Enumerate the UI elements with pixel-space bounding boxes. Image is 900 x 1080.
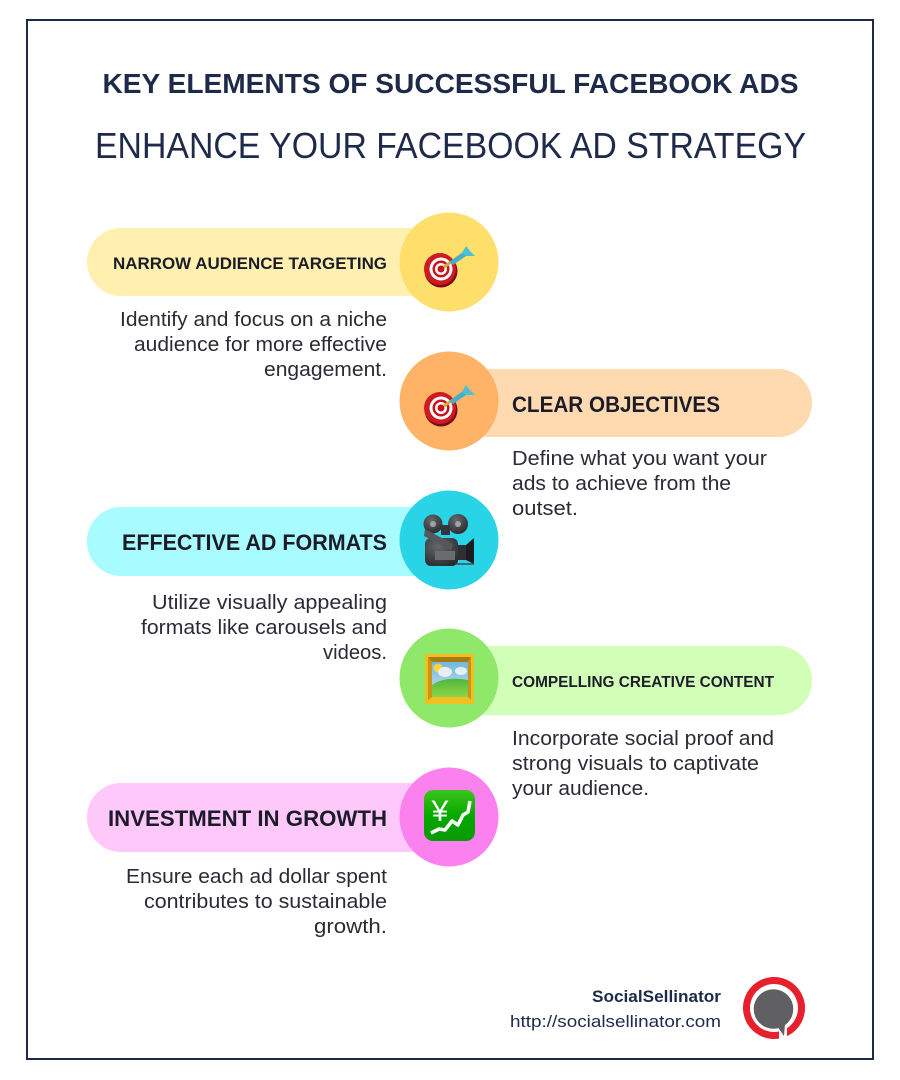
panel: effective ad formats [87,490,498,664]
text: narrow audience description: audience for more effective [134,334,387,356]
footer brand name: SocialSellinator [592,987,721,1006]
circle: effective ad formats [400,490,498,590]
text: narrow audience description: engagement. [264,359,387,381]
text: investment in growth description: contributes to sustainable [144,891,387,913]
logo: speech bubble ring [743,977,805,1041]
text: effective ad formats description: Utilize visually appealing [152,592,387,614]
text: clear objectives description: outset. [512,498,578,520]
text: compelling creative description: Incorporate social proof and [512,728,774,750]
icon: movie camera [424,514,474,566]
heading: narrow audience targeting: NARROW AUDIENCE TARGETING [113,254,387,273]
icon: dartboard [424,246,475,288]
text: clear objectives description: Define what you want your [512,448,767,470]
panel: investment in growth [87,768,498,938]
text: compelling creative description: strong visuals to captivate [512,753,759,775]
pill: investment in growth [87,783,457,852]
icon: chart with yen: ¥ [431,795,449,828]
text: clear objectives description: ads to achieve from the [512,473,731,495]
panel: narrow audience targeting [87,212,498,381]
footer url: http://socialsellinator.com [510,1012,721,1031]
pill: clear objectives [442,369,812,437]
icon: framed picture [425,654,474,704]
circle: narrow audience targeting [400,212,498,312]
circle: investment in growth [400,768,498,866]
pill: narrow audience targeting [87,228,457,296]
pill: compelling creative content [442,646,812,715]
heading: investment in growth: INVESTMENT IN GROWTH [108,806,387,831]
subtitle: ENHANCE YOUR FACEBOOK AD STRATEGY [95,125,806,166]
panel: compelling creative content [400,628,812,800]
text: compelling creative description: your audience. [512,778,649,800]
text: effective ad formats description: videos. [323,642,387,664]
text: investment in growth description: Ensure each ad dollar spent [126,866,387,888]
text: effective ad formats description: formats like carousels and [141,617,387,639]
circle: compelling creative content [400,628,498,728]
text: investment in growth description: growth. [314,916,387,938]
heading: effective ad formats: EFFECTIVE AD FORMATS [122,530,387,555]
title: KEY ELEMENTS OF SUCCESSFUL FACEBOOK ADS [102,68,798,99]
text: narrow audience description: Identify and focus on a niche [120,309,387,331]
heading: clear objectives: CLEAR OBJECTIVES [512,392,720,417]
panel: clear objectives [400,352,812,520]
pill: effective ad formats [87,507,457,576]
icon: dartboard [424,385,475,426]
circle: clear objectives [400,352,498,450]
heading: compelling creative content: COMPELLING CREATIVE CONTENT [512,674,774,691]
icon: chart with yen [424,790,475,841]
